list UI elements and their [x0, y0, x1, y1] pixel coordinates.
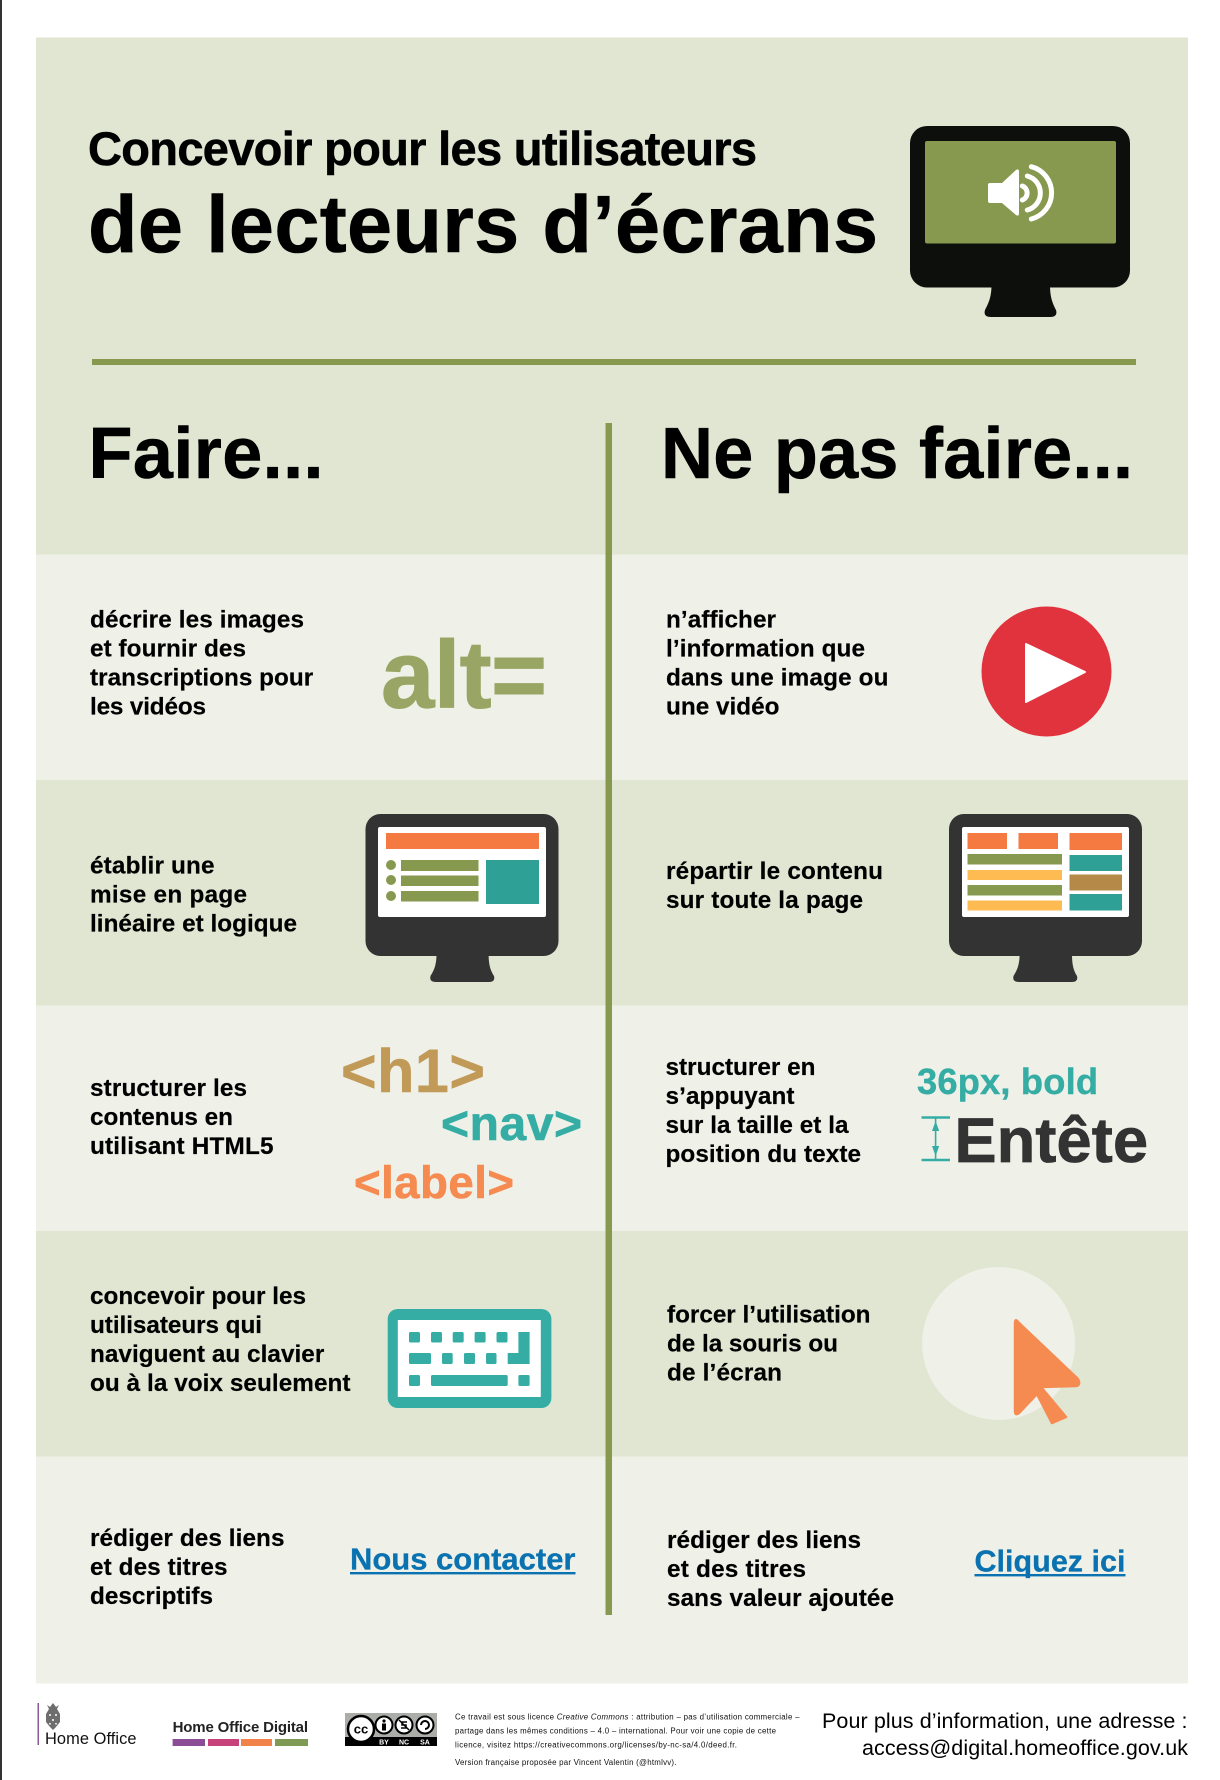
icon: alt=: alt=	[381, 622, 547, 728]
licence badge: creative commons: cc	[354, 1722, 368, 1736]
licence text: Ce travail est sous licence Creative Commons : attribution – pas d’utilisation commerciale –	[455, 1712, 800, 1722]
text: répartir le contenu: répartir le contenu	[666, 858, 883, 885]
HTML5 tags: <nav>	[441, 1098, 582, 1151]
licence text: partage dans les mêmes conditions – 4.0 – international. Pour voir une copie de cette	[455, 1726, 777, 1736]
licence text: licence, visitez https://creativecommons.org/licenses/by-nc-sa/4.0/deed.fr.	[455, 1740, 737, 1750]
text: concevoir pour les utilisateurs: concevoir pour les	[90, 1283, 306, 1310]
title	[88, 122, 878, 270]
contact information: access@digital.homeoffice.gov.uk	[862, 1736, 1188, 1760]
text: concevoir pour les utilisateurs: naviguent au clavier	[90, 1341, 325, 1368]
text: rédiger des liens descriptifs	[90, 1525, 284, 1610]
logo: Home Office	[38, 1703, 136, 1748]
text: n'afficher: dans une image ou	[666, 664, 888, 692]
heading: Faire: Faire...	[88, 414, 324, 494]
text: décrire les images: les vidéos	[90, 694, 206, 720]
text: structurer les contenus	[90, 1075, 274, 1160]
licence badge: creative commons: BY	[379, 1740, 389, 1746]
text: structurer en s'appuyant	[666, 1054, 861, 1168]
icon: mouse cursor	[922, 1267, 1079, 1423]
icon: play button	[982, 606, 1112, 736]
text: répartir le contenu: sur toute la page	[666, 887, 863, 914]
text: n'afficher: l’information que	[666, 636, 865, 662]
contact information: Pour plus d’information, une adresse :	[822, 1709, 1188, 1733]
heading size example: Entête	[954, 1106, 1148, 1176]
text: concevoir pour les utilisateurs: ou à la voix seulement	[90, 1370, 350, 1397]
text: rédiger des liens sans valeur: sans valeur ajoutée	[667, 1585, 894, 1612]
title: de lecteurs d’écrans	[88, 180, 878, 270]
HTML5 tags: <label>	[354, 1157, 514, 1208]
text: structurer les contenus: structurer les	[90, 1075, 247, 1102]
licence badge: creative commons	[345, 1713, 437, 1746]
text: structurer en s'appuyant: position du texte	[666, 1141, 861, 1168]
text: structurer les contenus: contenus en	[90, 1104, 233, 1131]
heading size example: 36px, bold	[917, 1061, 1098, 1102]
text: décrire les images	[90, 606, 314, 720]
text: concevoir pour les utilisateurs	[90, 1283, 350, 1397]
HTML5 tags: <h1>	[341, 1037, 485, 1105]
licence text: Version française proposée par Vincent Valentin (@htmlvv).	[455, 1758, 676, 1767]
icon: monitor with speaker	[910, 126, 1130, 317]
text: structurer les contenus: utilisant HTML5	[90, 1133, 274, 1160]
text: rédiger des liens descriptifs: et des titres	[90, 1554, 228, 1581]
text: établir une mise en page	[90, 852, 297, 938]
link: Nous contacter: Nous contacter	[350, 1542, 576, 1576]
text: décrire les images: décrire les images	[90, 606, 304, 634]
text: n'afficher: n’afficher	[666, 606, 777, 634]
text: forcer l'utilisation: de l’écran	[667, 1360, 782, 1386]
icon: monitor linear layout	[366, 814, 558, 982]
text: structurer en s'appuyant: s’appuyant	[666, 1083, 794, 1110]
text: concevoir pour les utilisateurs: utilisateurs qui	[90, 1312, 262, 1339]
text: n'afficher: une vidéo	[666, 694, 780, 720]
text: rédiger des liens descriptifs: rédiger des liens	[90, 1525, 284, 1552]
title: Concevoir pour les utilisateurs	[88, 122, 757, 175]
icon: monitor scattered layout	[949, 814, 1142, 982]
text: rédiger des liens sans valeur: rédiger des liens	[667, 1527, 861, 1554]
text: établir une mise en page: établir une	[90, 852, 214, 880]
text: rédiger des liens descriptifs: descriptifs	[90, 1583, 213, 1610]
text: décrire les images: transcriptions pour	[90, 664, 314, 692]
text: forcer l'utilisation: forcer l’utilisation	[667, 1302, 870, 1328]
text: établir une mise en page: mise en page	[90, 882, 247, 908]
text: répartir le contenu	[666, 858, 883, 914]
text: n'afficher	[666, 606, 888, 720]
text: forcer l'utilisation	[667, 1302, 870, 1386]
licence text	[455, 1712, 800, 1767]
licence badge: creative commons: SA	[420, 1740, 430, 1746]
text: structurer en s'appuyant: structurer en	[666, 1054, 816, 1081]
heading size example	[917, 1061, 1148, 1176]
logo: Home Office: Home Office	[45, 1730, 136, 1748]
text: rédiger des liens sans valeur: et des titres	[667, 1556, 806, 1583]
text: rédiger des liens sans valeur	[667, 1527, 894, 1612]
text: décrire les images: et fournir des	[90, 636, 246, 662]
link: Cliquez ici: Cliquez ici	[974, 1544, 1126, 1578]
text: structurer en s'appuyant: sur la taille et la	[666, 1112, 849, 1139]
icon: keyboard	[388, 1309, 551, 1408]
heading: Ne pas faire: Ne pas faire...	[661, 414, 1133, 494]
text: forcer l'utilisation: de la souris ou	[667, 1330, 838, 1358]
licence badge: creative commons: NC	[399, 1740, 409, 1746]
logo: Home Office Digital: Home Office Digital	[173, 1719, 308, 1736]
HTML5 tags	[341, 1037, 582, 1208]
logo: Home Office Digital	[173, 1719, 308, 1746]
text: établir une mise en page: linéaire et logique	[90, 910, 297, 938]
contact information	[822, 1709, 1188, 1760]
